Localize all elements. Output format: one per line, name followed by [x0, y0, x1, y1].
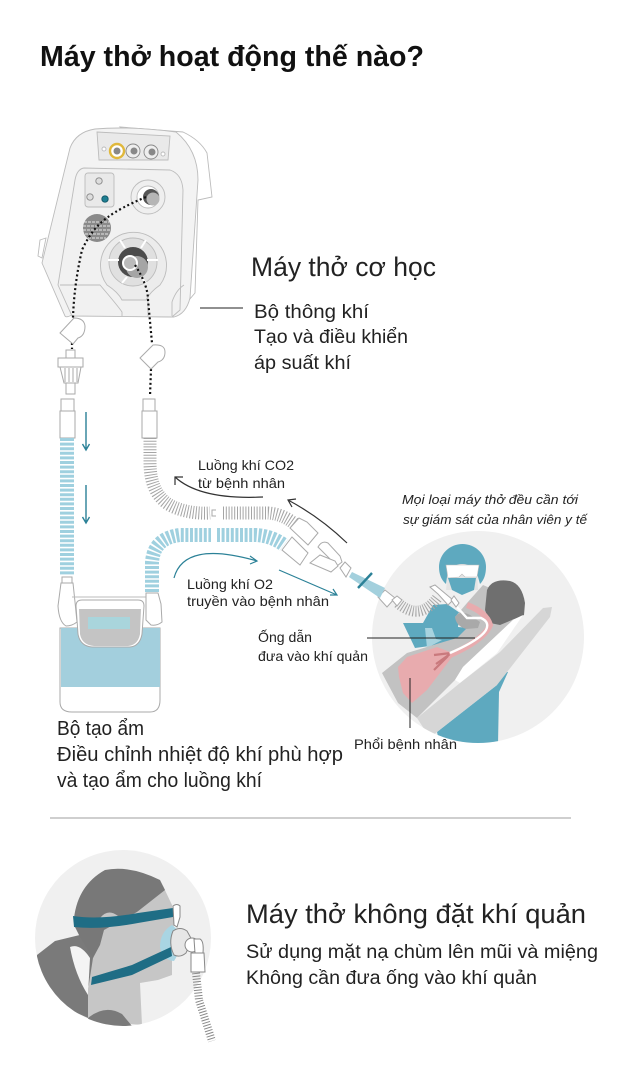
patient hair [485, 580, 525, 625]
bronchi [434, 653, 451, 670]
elbow connectors [60, 318, 165, 369]
mask device [171, 904, 205, 972]
upper round port [131, 180, 165, 214]
white return hose [142, 399, 297, 526]
label: tube: đưa vào khí quản [258, 648, 368, 664]
humidifier body [60, 628, 160, 712]
patient mouth shading [455, 613, 480, 629]
noninvasive text: Máy thở không đặt khí quản [246, 899, 586, 929]
left elbow [60, 318, 85, 344]
label: ventilator: áp suất khí [254, 353, 352, 374]
humidifier [60, 593, 162, 712]
machine side handle [38, 238, 46, 258]
breathing tube [450, 606, 487, 653]
mask illustration [35, 850, 212, 1041]
noninvasive text: Sử dụng mặt nạ chùm lên mũi và miệng [246, 942, 598, 963]
trachea [450, 605, 490, 655]
labels: co2 flow [198, 457, 294, 491]
noninvasive text [246, 899, 598, 989]
co2 flow arrows [175, 477, 347, 543]
caption: medical staff [402, 492, 588, 527]
label: tube: Ống dẫn [258, 628, 312, 645]
bed [417, 607, 552, 738]
display unit [76, 600, 144, 647]
machine back housing [120, 127, 212, 300]
caption: medical staff: Mọi loại máy thở đều cần tới [402, 492, 579, 507]
lower strap [91, 947, 172, 985]
lines to labels [367, 638, 475, 728]
labels: co2 flow: Luồng khí CO2 [198, 457, 294, 473]
nurse cap [439, 544, 486, 584]
nurse lower body [437, 672, 508, 745]
o2 flow arrows [174, 554, 337, 595]
right connector [146, 593, 162, 625]
hair bun [37, 935, 94, 1018]
ear [100, 912, 118, 918]
small connector square [85, 173, 114, 207]
nose cushion [160, 925, 176, 961]
nurse light patch [425, 628, 442, 648]
label: ventilator: Máy thở cơ học [251, 252, 436, 282]
hair top [74, 869, 165, 958]
label: humidifier: và tạo ẩm cho luồng khí [57, 770, 262, 792]
left blue hose [58, 399, 77, 626]
mask hose [196, 973, 212, 1041]
front panel [58, 168, 183, 317]
label: humidifier: Điều chỉnh nhiệt độ khí phù hợp [57, 744, 343, 766]
filter [58, 350, 83, 394]
blue inspiratory hose [152, 535, 284, 592]
labels: o2 flow [187, 576, 329, 609]
label: tube [258, 628, 368, 664]
nurse mask [448, 578, 476, 595]
labels: co2 flow: từ bệnh nhân [198, 475, 285, 491]
noninvasive text: Không cần đưa ống vào khí quản [246, 968, 537, 989]
labels: o2 flow: Luồng khí O2 [187, 576, 273, 592]
top port plate [97, 132, 170, 160]
dotted air paths [72, 197, 152, 396]
neck shadow [88, 1010, 132, 1026]
upper strap [73, 908, 173, 928]
lower panel band [60, 285, 184, 316]
right elbow [140, 345, 165, 369]
label: ventilator: Tạo và điều khiển [254, 327, 408, 348]
patient illustration [349, 531, 584, 745]
nurse face [446, 564, 478, 590]
gap [70, 946, 90, 995]
background circle [35, 850, 211, 1026]
pillow gap [455, 615, 523, 683]
main round port [100, 232, 166, 300]
machine body [42, 128, 198, 317]
ventilator machine [38, 127, 212, 317]
patient body [382, 585, 513, 718]
nurse upper body [403, 604, 470, 648]
y connector [282, 518, 351, 577]
nurse goggles [446, 565, 479, 578]
labels: o2 flow: truyền vào bệnh nhân [187, 593, 329, 609]
label: humidifier [57, 718, 343, 792]
background circle [372, 531, 584, 743]
label: lungs: Phổi bệnh nhân [354, 736, 457, 752]
speaker grille [83, 214, 111, 242]
caption: medical staff: sự giám sát của nhân viên y tế [403, 512, 588, 527]
title: Máy thở hoạt động thế nào? [40, 41, 424, 73]
patient tube set [349, 572, 459, 611]
label: ventilator [200, 252, 436, 374]
label: ventilator: Bộ thông khí [254, 302, 370, 323]
label: humidifier: Bộ tạo ẩm [57, 718, 144, 740]
lungs [398, 647, 452, 703]
flow arrows down [82, 412, 90, 523]
face [88, 886, 174, 1025]
